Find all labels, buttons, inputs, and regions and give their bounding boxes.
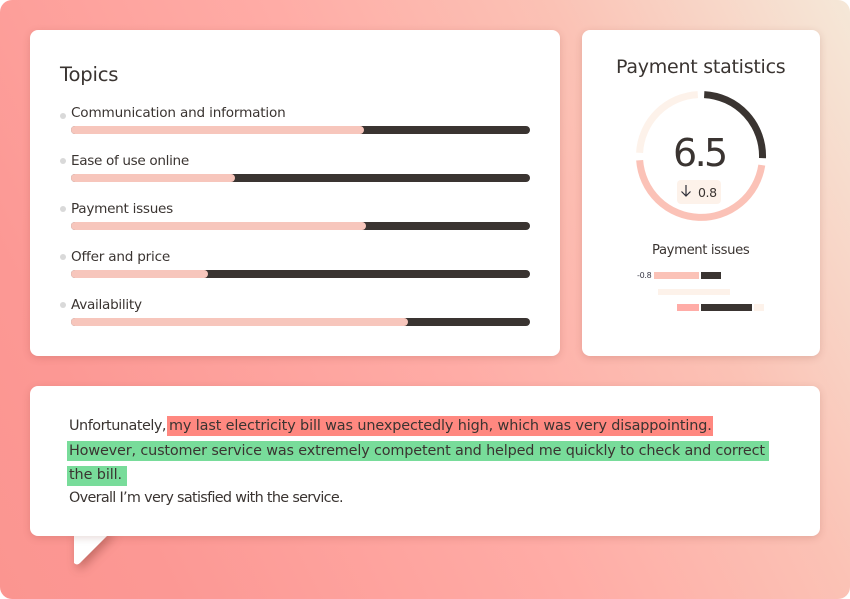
icon: down arrow <box>681 185 691 197</box>
topic row: availability: Availability <box>71 297 142 313</box>
stacked bar row 1 <box>654 272 721 279</box>
review text: Unfortunately, <box>69 418 166 434</box>
highlight: positive sentence line 2 <box>67 466 127 486</box>
highlight: negative sentence <box>167 416 713 436</box>
subheading: payment issues: Payment issues <box>652 243 749 258</box>
score value: 6.5 <box>673 131 726 175</box>
stacked bar row 3 <box>677 304 764 311</box>
topic row: availability <box>60 297 530 326</box>
heading: topics: Topics <box>60 63 118 86</box>
review text: Overall I’m very satisfied with the service. <box>69 490 343 506</box>
review text: the bill. <box>69 467 122 483</box>
topic row: payment issues: Payment issues <box>71 201 173 217</box>
stacked bars <box>637 271 764 311</box>
speech bubble tail <box>72 536 116 571</box>
delta badge <box>677 180 721 204</box>
donut gauge <box>636 91 766 221</box>
review text: my last electricity bill was unexpectedly high, which was very disappointing. <box>169 418 712 434</box>
topic row: communication and information <box>60 105 530 134</box>
review text <box>69 418 765 506</box>
stacked bar row 2 <box>658 289 730 295</box>
topic row: ease of use online: Ease of use online <box>71 153 189 169</box>
topic row: offer and price <box>60 249 530 278</box>
panel: topics <box>30 30 560 356</box>
panel: customer review <box>30 386 820 536</box>
panel: payment statistics <box>582 30 820 356</box>
heading: payment statistics: Payment statistics <box>616 56 785 78</box>
delta label: -0.8 <box>637 271 651 280</box>
topic row: offer and price: Offer and price <box>71 249 170 265</box>
highlight: positive sentence line 1 <box>67 441 769 461</box>
delta value: 0.8 <box>698 185 717 200</box>
topic row: ease of use online <box>60 153 530 182</box>
topic row: communication and information: Communication and information <box>71 105 286 121</box>
topic row: payment issues <box>60 201 530 230</box>
review text: However, customer service was extremely competent and helped me quickly to check and correct <box>69 443 765 459</box>
